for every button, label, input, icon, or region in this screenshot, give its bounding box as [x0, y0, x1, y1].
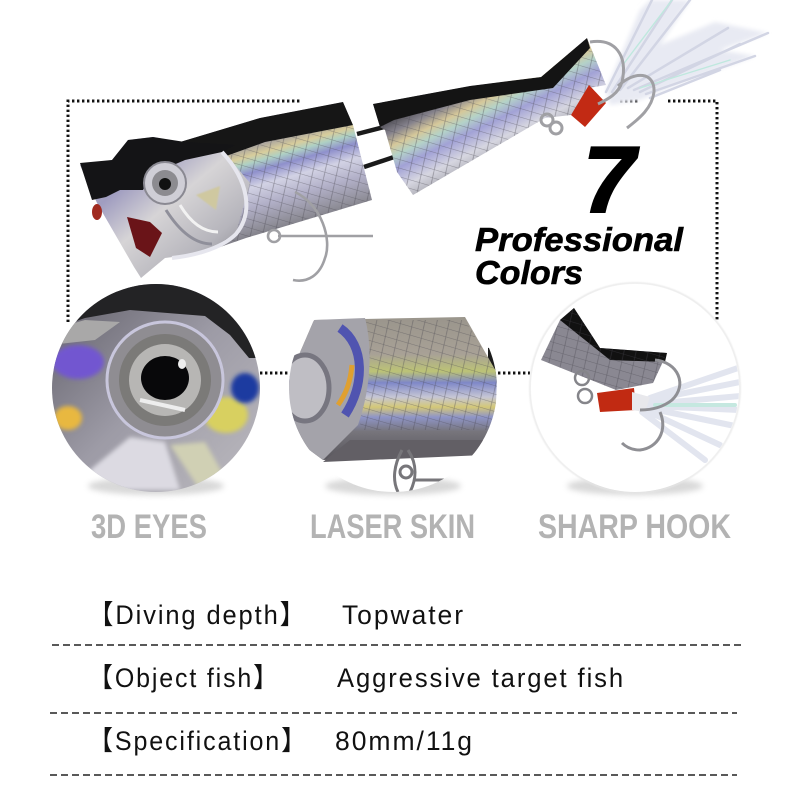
front treble hook [268, 192, 373, 281]
main lure photo [80, 0, 768, 281]
panel: laser skin close-up [289, 317, 497, 492]
spec row: diving depth [88, 600, 465, 630]
headline: Professional Colors: Colors [475, 254, 583, 291]
rear hook binding, red [571, 85, 606, 127]
faint circle outline for the white close-up [530, 283, 740, 493]
spec row: object fish: Aggressive target fish [337, 663, 625, 693]
spec row: object fish: 【Object fish】 [88, 663, 280, 693]
connector pins [357, 126, 394, 167]
label: SHARP HOOK: SHARP HOOK [538, 508, 731, 546]
panel: sharp hook close-up [541, 308, 739, 492]
label: 3D EYES: 3D EYES [91, 508, 207, 546]
panel: 3D eyes close-up [50, 280, 262, 495]
feather tail [606, 0, 768, 105]
lure head [80, 137, 250, 278]
gill ridge [172, 152, 246, 258]
spec row: specification [88, 726, 474, 756]
circle shadows [88, 477, 703, 495]
lure mouth [127, 217, 162, 257]
spec row: specification: 【Specification】 [88, 726, 308, 756]
spec row: specification: 80mm/11g [335, 726, 474, 756]
dotted frame around the main lure [68, 101, 717, 373]
spec row: diving depth: 【Diving depth】 [88, 600, 307, 630]
spec row: diving depth: Topwater [342, 600, 465, 630]
headline: Professional Colors: Professional [475, 221, 684, 258]
rear lure segment [370, 35, 610, 200]
lure eye [144, 162, 186, 204]
spec row: object fish [88, 663, 625, 693]
headline: 7: 7 [583, 127, 639, 232]
label: LASER SKIN: LASER SKIN [310, 508, 475, 546]
front lure segment [182, 102, 372, 247]
rear treble hook [541, 41, 654, 134]
